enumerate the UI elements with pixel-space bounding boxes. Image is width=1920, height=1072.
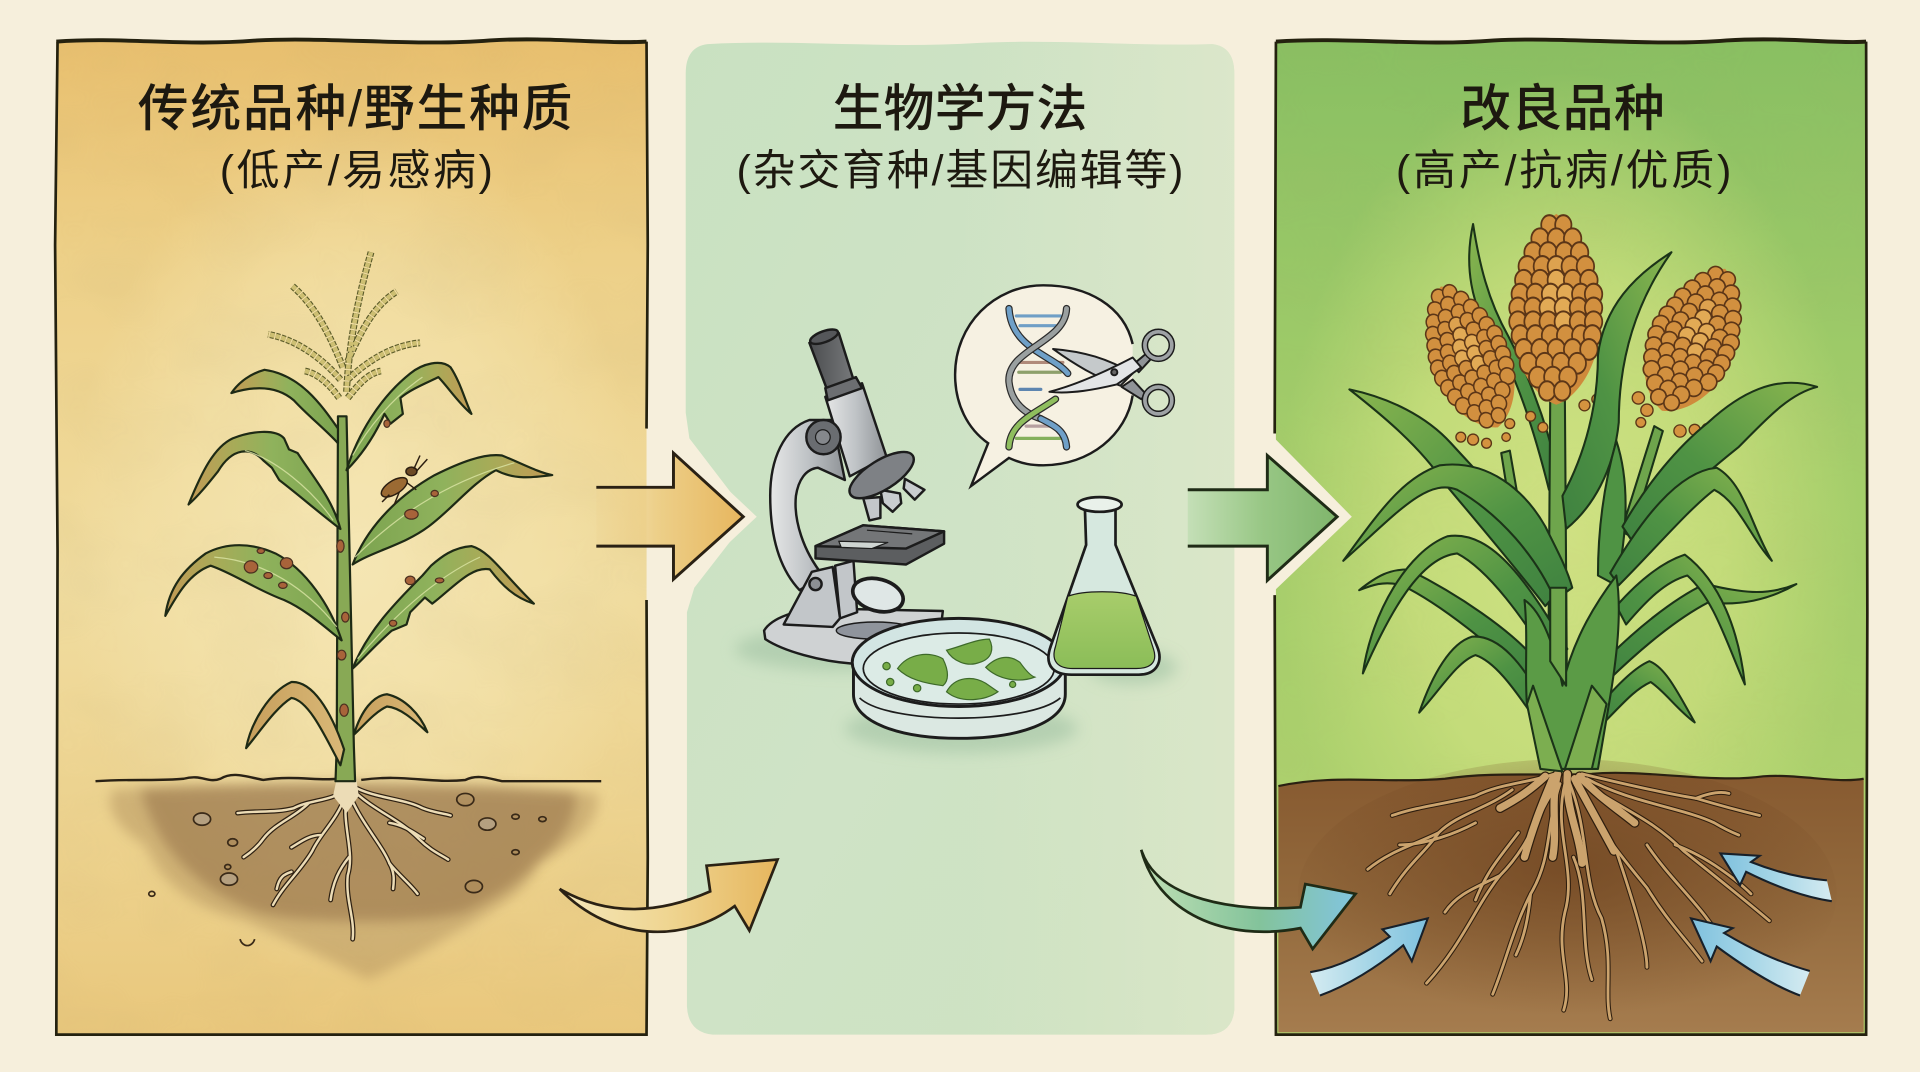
upright back leaf left	[1469, 224, 1558, 490]
title: improved varieties: 改良品种	[1460, 80, 1665, 137]
panel: improved varieties	[1276, 39, 1866, 1035]
upright front leaf right	[1562, 252, 1671, 529]
plant: diseased traditional crop	[165, 252, 552, 781]
arrow: gold curved	[560, 860, 778, 932]
pillar	[784, 561, 857, 627]
title: biological methods: 生物学方法	[833, 80, 1087, 137]
title: traditional varieties	[138, 80, 572, 195]
arrow: gold straight	[596, 438, 757, 595]
arm	[770, 420, 845, 590]
panicle center	[1509, 214, 1602, 405]
title: traditional varieties: (低产/易感病)	[220, 147, 493, 195]
leaf lower left	[165, 545, 342, 640]
roots: improved plant soil	[1278, 759, 1864, 1032]
lab shadow	[735, 627, 1177, 753]
icon: microscope	[764, 327, 944, 664]
leaf mid left	[189, 432, 340, 529]
panicle left	[1403, 272, 1535, 443]
arrow: green to blue curved	[1141, 850, 1356, 949]
DNA helix	[1009, 309, 1068, 447]
leaf lower right	[353, 546, 534, 669]
stage	[816, 525, 944, 564]
icon: petri dish	[852, 618, 1065, 738]
leaf bottom right	[354, 694, 427, 735]
nosepiece	[843, 443, 921, 507]
leaf mid right	[353, 455, 552, 564]
tube	[825, 383, 887, 476]
panicle right	[1621, 251, 1765, 428]
sheath base	[1524, 575, 1619, 769]
stem spots	[244, 420, 444, 716]
tassel	[268, 252, 420, 398]
base	[764, 609, 943, 664]
leaf top left	[231, 370, 338, 443]
title: improved varieties: (高产/抗病/优质)	[1396, 147, 1731, 195]
panel: biological methods	[686, 42, 1234, 1035]
small florets	[1456, 392, 1712, 448]
panel: traditional varieties	[56, 39, 647, 1035]
leaf midribs	[214, 377, 514, 659]
soil: traditional panel	[96, 775, 601, 980]
scissors	[1049, 332, 1172, 414]
icon: insect on leaf	[378, 455, 427, 504]
side leaves	[1359, 569, 1537, 681]
title: improved varieties	[1396, 80, 1731, 195]
panicle stalks	[1501, 400, 1663, 747]
leaf bottom left	[246, 682, 344, 765]
title: biological methods: (杂交育种/基因编辑等)	[737, 147, 1183, 195]
knob	[806, 420, 841, 454]
leaf top right	[347, 363, 471, 470]
objectives	[863, 497, 880, 520]
speech bubble: gene editing	[955, 285, 1172, 486]
arrow: green straight	[1188, 433, 1352, 595]
leaf pieces	[883, 639, 1035, 700]
mirror	[849, 573, 907, 617]
title: traditional varieties: 传统品种/野生种质	[138, 80, 572, 137]
roots: traditional plant	[238, 779, 451, 939]
arrows: water uptake	[1310, 853, 1832, 995]
stem	[336, 416, 355, 781]
plant: improved high-yield crop	[1343, 214, 1817, 771]
title: biological methods	[737, 80, 1183, 195]
icon: flask	[1048, 497, 1159, 675]
